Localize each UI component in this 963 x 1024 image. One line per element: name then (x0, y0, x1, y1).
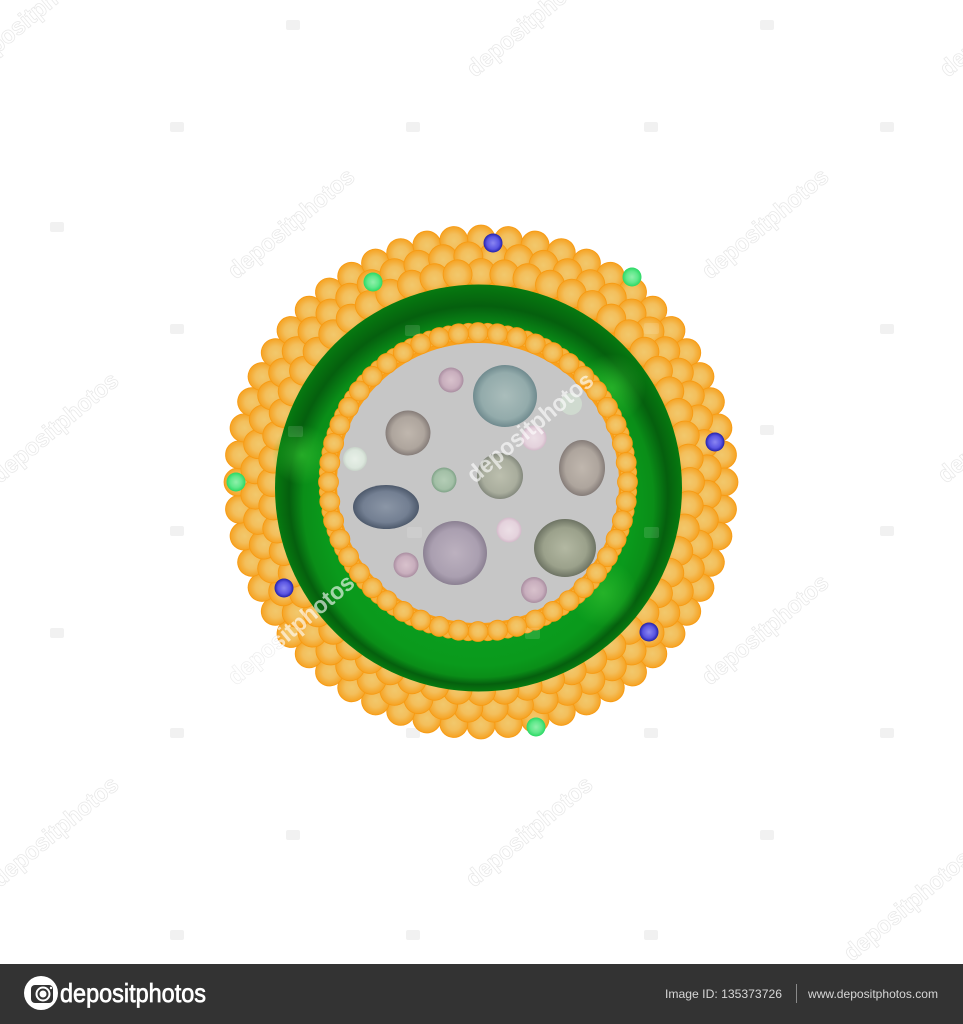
green marker (526, 718, 546, 736)
organelle: pink small top (438, 368, 464, 392)
website url: www.depositphotos.com (807, 987, 938, 1001)
inner ring backing spheres (244, 260, 695, 743)
grey cell interior (337, 343, 619, 623)
green membrane ring (272, 284, 682, 692)
green marker (226, 472, 246, 492)
surface markers (226, 234, 724, 736)
organelle: slate oval left (353, 485, 419, 529)
watermark layer behind illustration: depositphotos (461, 771, 598, 893)
outer layer of orange spheres (186, 165, 807, 801)
blue marker (640, 622, 658, 642)
watermark layer behind illustration: depositphotos (697, 163, 834, 285)
logo: camera badge (24, 976, 58, 1010)
organelle: pale green upper right (560, 393, 582, 415)
organelle: pale green left (343, 447, 367, 471)
organelle: green small center (432, 468, 456, 492)
organelles inside the cell (343, 365, 605, 603)
footer divider (796, 984, 797, 1003)
watermark layer behind illustration: depositphotos (223, 569, 360, 691)
organelle: large mauve (423, 521, 487, 585)
image id: Image ID: 135373726 (665, 987, 782, 1001)
green marker (622, 268, 642, 286)
organelle: brown oval right (559, 440, 605, 496)
blue marker (706, 432, 724, 452)
organelle: moss oval lower right (534, 519, 596, 577)
organelle: pink small lower left (394, 552, 418, 578)
watermark over illustration: depositphotos (462, 367, 599, 489)
organelle: light pink center (496, 518, 522, 542)
watermark over illustration (223, 323, 659, 691)
watermark over illustration: depositphotos (223, 569, 360, 691)
organelle: brown round (386, 410, 430, 456)
footer bar (0, 964, 963, 1024)
organelle: pink small bottom (521, 577, 547, 603)
blue marker (274, 578, 294, 598)
watermark layer behind illustration: depositphotos (223, 163, 360, 285)
organelle: olive center (477, 453, 523, 499)
blue marker (484, 234, 502, 252)
organelle: large teal (473, 365, 537, 427)
organelle: light pink upper (522, 426, 546, 450)
inner ring of orange spheres (236, 258, 687, 743)
green marker (364, 272, 382, 292)
watermark layer behind illustration: depositphotos (697, 569, 834, 691)
logo wordmark: depositphotos (60, 978, 206, 1008)
